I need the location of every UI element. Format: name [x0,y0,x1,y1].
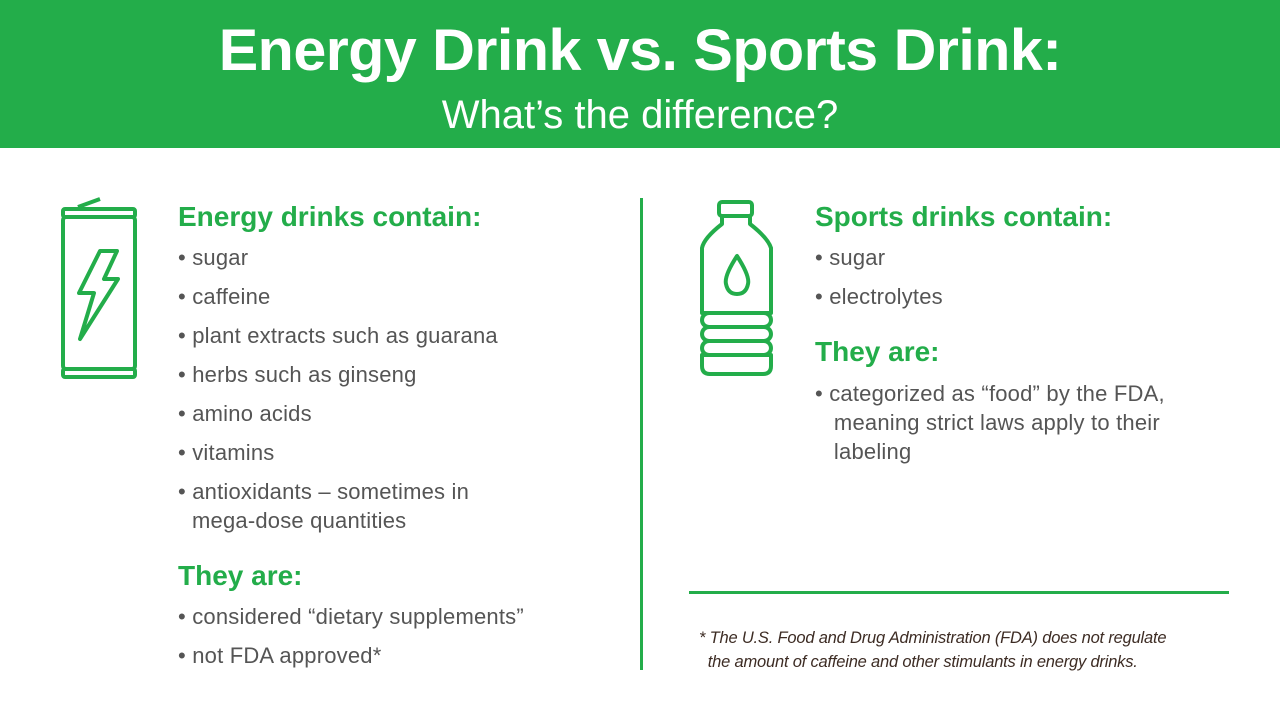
list: sports drink ingredients: • sugar [815,245,885,270]
list: energy drink ingredients: • amino acids [178,401,312,426]
title: Energy Drink vs. Sports Drink: [219,18,1061,83]
list: sports drink ingredients: • electrolytes [815,284,943,309]
list: energy drink ingredients: • herbs such as ginseng [178,362,417,387]
list: energy drink status: • not FDA approved* [178,643,382,668]
list: energy drink ingredients [178,245,498,504]
list: sports drink ingredients [815,245,943,309]
footnote: * The U.S. Food and Drug Administration (FDA) does not regulate [699,629,1166,647]
divider horizontal [689,591,1229,594]
list: energy drink ingredients: • sugar [178,245,248,270]
subtitle: What’s the difference? [442,93,838,137]
list: energy drink status: • considered “dietary supplements” [178,604,524,629]
list: energy drink ingredients: • caffeine [178,284,270,309]
panel: sports drinks [815,201,1165,464]
divider vertical [640,198,643,670]
icon: energy drink can [61,197,137,379]
list: sports drink status [815,381,1165,464]
list: energy drink status [178,604,524,668]
panel: energy drinks [178,201,524,668]
panel: energy drinks: mega-dose quantities [192,508,406,533]
list: energy drink ingredients: • plant extracts such as guarana [178,323,498,348]
list: sports drink status: labeling [834,439,911,464]
header banner [0,0,1280,148]
footnote: the amount of caffeine and other stimulants in energy drinks. [708,653,1138,671]
heading: they are: They are: [815,336,940,367]
heading: they are: They are: [178,560,302,591]
footnote [699,629,1166,671]
list: sports drink status: • categorized as “food” by the FDA, [815,381,1165,406]
list: sports drink status: meaning strict laws apply to their [834,410,1160,435]
list: energy drink ingredients: • antioxidants – sometimes in [178,479,469,504]
list: energy drink ingredients: • vitamins [178,440,274,465]
icon: water bottle [700,200,773,376]
heading: sports drinks contain: Sports drinks contain: [815,201,1112,232]
heading: energy drinks contain: Energy drinks contain: [178,201,481,232]
